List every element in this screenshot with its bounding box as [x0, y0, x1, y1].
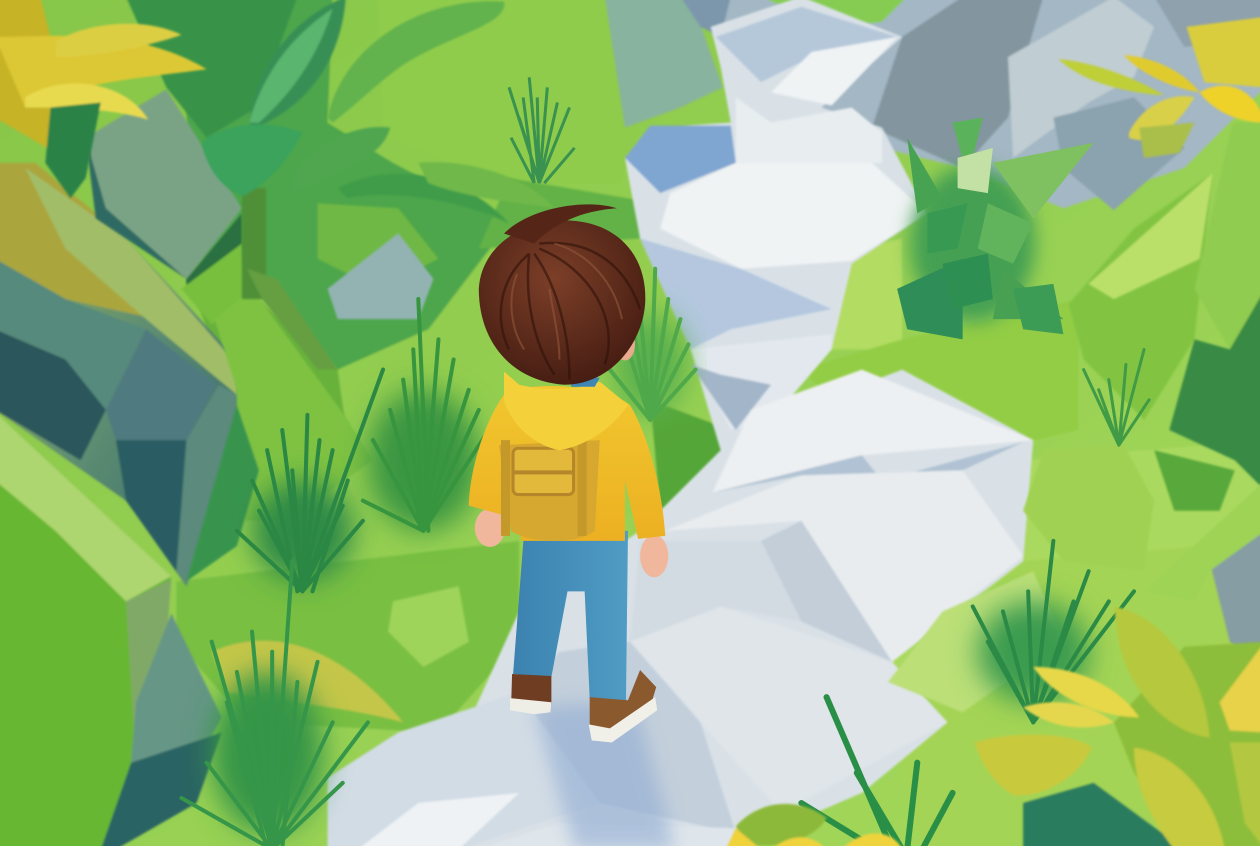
white stone path — [328, 0, 1033, 846]
rock: grey-green boulder, upper left — [86, 89, 247, 324]
hands — [475, 509, 668, 577]
hood — [504, 372, 628, 450]
left shoe — [510, 674, 551, 714]
backpack — [499, 440, 600, 541]
plant: yellow leaves, top left — [0, 0, 207, 198]
hoodie — [469, 386, 665, 541]
plant: large yellow leaves, lower right — [726, 606, 1260, 846]
plant: tropical palm, top left — [126, 0, 554, 370]
background: top-right grey rocks — [605, 0, 1260, 210]
plant: leafy green shrub, right of path — [897, 118, 1094, 339]
right shoe — [589, 670, 657, 743]
plant: grass tufts, lower right — [801, 541, 1134, 846]
rock: faceted green boulders, right — [888, 123, 1260, 712]
rock: large teal faceted boulder, left — [0, 163, 237, 586]
character: child in yellow hoodie seen from behind — [469, 204, 675, 846]
plant: grass tuft, upper centre — [509, 77, 575, 183]
legs — [513, 531, 628, 700]
rock: bright green slab, centre left — [186, 289, 373, 581]
shadow on path — [534, 702, 675, 846]
collar — [570, 378, 600, 387]
plant: yellow leaves, top right — [1058, 17, 1260, 158]
plant: grass and yellow leaves, lower left — [181, 561, 403, 846]
plant: grass tufts beside the child — [237, 269, 1149, 591]
ear — [615, 328, 635, 361]
rock: bright green boulder, lower left — [0, 412, 222, 846]
hair — [479, 204, 645, 385]
